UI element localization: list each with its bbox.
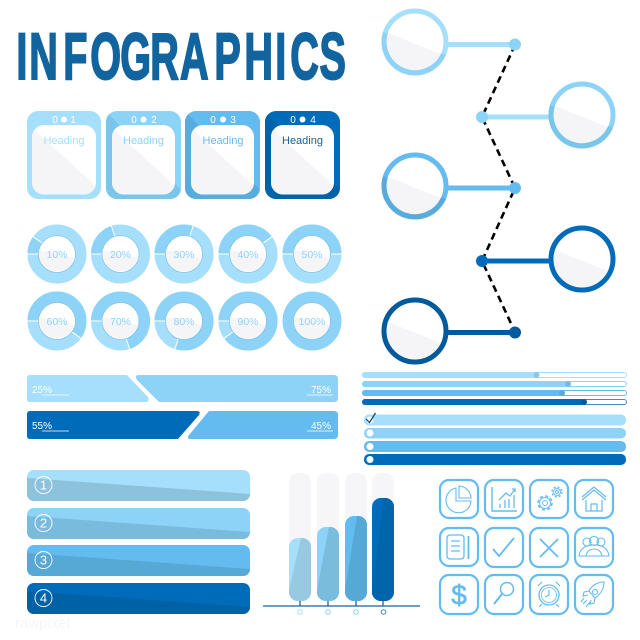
- card 02: 2: [151, 115, 157, 126]
- bar 25%: 25%: [32, 385, 52, 396]
- bar chart: [263, 473, 420, 614]
- donut 20%: 20%: [110, 249, 131, 261]
- axis markers: [298, 610, 386, 614]
- bar 25%: [27, 375, 149, 402]
- donut 10%: [27, 230, 81, 278]
- checklist bar 1: [364, 413, 626, 426]
- card 01: 1: [70, 115, 76, 126]
- donut 40%: 40%: [237, 249, 259, 261]
- icon: magnifier: [485, 575, 523, 614]
- panel: zigzag timeline: [384, 11, 613, 362]
- checklist bar 4: [364, 454, 626, 465]
- card 02: 0: [131, 115, 137, 126]
- card 04: [265, 111, 340, 199]
- bar 1: [289, 473, 311, 601]
- icon: check mark: [485, 528, 523, 567]
- node 5: [384, 300, 521, 362]
- donut 50%: 50%: [301, 249, 323, 261]
- panel: numbered banners: [27, 470, 250, 614]
- banner 3: 3: [40, 552, 47, 568]
- panel: percentage donuts: [27, 225, 342, 350]
- donut 60%: 60%: [46, 316, 68, 328]
- bar 45%: [188, 411, 338, 439]
- icon: house: [575, 480, 613, 518]
- card 02: Heading: [123, 135, 164, 147]
- card 03: 0: [210, 115, 216, 126]
- icon: dollar sign: [440, 575, 478, 614]
- slider 4: [362, 399, 626, 405]
- bar 55%: [27, 411, 200, 439]
- bar 75%: 75%: [311, 385, 331, 396]
- card 03: Heading: [203, 135, 243, 147]
- card 03: 3: [230, 115, 236, 126]
- donut 20%: [90, 225, 144, 278]
- icon: cross mark: [530, 528, 568, 567]
- icon: pie chart: [440, 480, 478, 518]
- card 03: [185, 111, 260, 199]
- bar 3: [345, 473, 367, 601]
- checklist bar 2: [364, 428, 626, 438]
- donut 30%: 30%: [173, 249, 195, 261]
- donut 80%: [154, 297, 208, 350]
- donut 70%: [90, 297, 144, 350]
- node 4: [476, 228, 613, 290]
- banner 1: [27, 470, 250, 501]
- donut 50%: [282, 230, 342, 278]
- slider 1: [362, 372, 626, 378]
- chart baseline and ticks: [263, 601, 420, 606]
- icon: rocket: [575, 575, 613, 614]
- donut 90%: [218, 297, 272, 345]
- icon: gears: [530, 480, 568, 518]
- node 2: [476, 84, 613, 146]
- icon: alarm clock: [530, 575, 568, 614]
- node 1: [384, 11, 521, 73]
- node 3: [384, 155, 521, 217]
- donut 30%: [154, 225, 208, 278]
- card 01: 0: [52, 115, 58, 126]
- bar 4: [372, 473, 394, 601]
- slider 2: [362, 381, 626, 387]
- panel: heading cards: [27, 111, 340, 199]
- icon: dollar sign: $: [451, 580, 467, 610]
- donut 100%: [288, 297, 336, 345]
- bar 55%: 55%: [32, 421, 52, 432]
- card 04: Heading: [282, 135, 323, 147]
- dashed connector: [482, 45, 515, 332]
- slider 3: [362, 390, 626, 396]
- icon: growth chart: [485, 480, 523, 518]
- banner 4: 4: [40, 590, 47, 606]
- card 04: 0: [290, 115, 296, 126]
- panel: split percentage bars: [27, 375, 338, 439]
- watermark: rawpixel: [15, 615, 70, 632]
- card 04: 4: [310, 115, 316, 126]
- icon: people group: [575, 528, 613, 567]
- donut 100%: 100%: [299, 316, 325, 328]
- checklist bar 3: [364, 441, 626, 452]
- banner 3: [27, 545, 250, 576]
- banner 1: 1: [40, 478, 47, 492]
- panel: checklist bars: [364, 413, 626, 465]
- donut 70%: 70%: [110, 316, 131, 328]
- card 01: [27, 111, 101, 199]
- banner 2: [27, 508, 250, 539]
- icon: document: [440, 528, 478, 566]
- donut 40%: [218, 230, 272, 278]
- donut 60%: [27, 297, 81, 345]
- bar 2: [317, 473, 339, 601]
- panel: icon grid: [440, 480, 613, 614]
- bar 75%: [136, 375, 338, 402]
- banner 4: [27, 583, 250, 614]
- donut 90%: 90%: [237, 316, 259, 328]
- donut 80%: 80%: [173, 316, 195, 328]
- title: INFOGRAPHICS: [16, 20, 346, 94]
- card 02: [106, 111, 181, 199]
- banner 2: 2: [40, 516, 47, 530]
- donut 10%: 10%: [46, 249, 68, 261]
- card 01: Heading: [44, 135, 84, 147]
- bar 45%: 45%: [311, 421, 331, 432]
- panel: sliders: [362, 372, 626, 405]
